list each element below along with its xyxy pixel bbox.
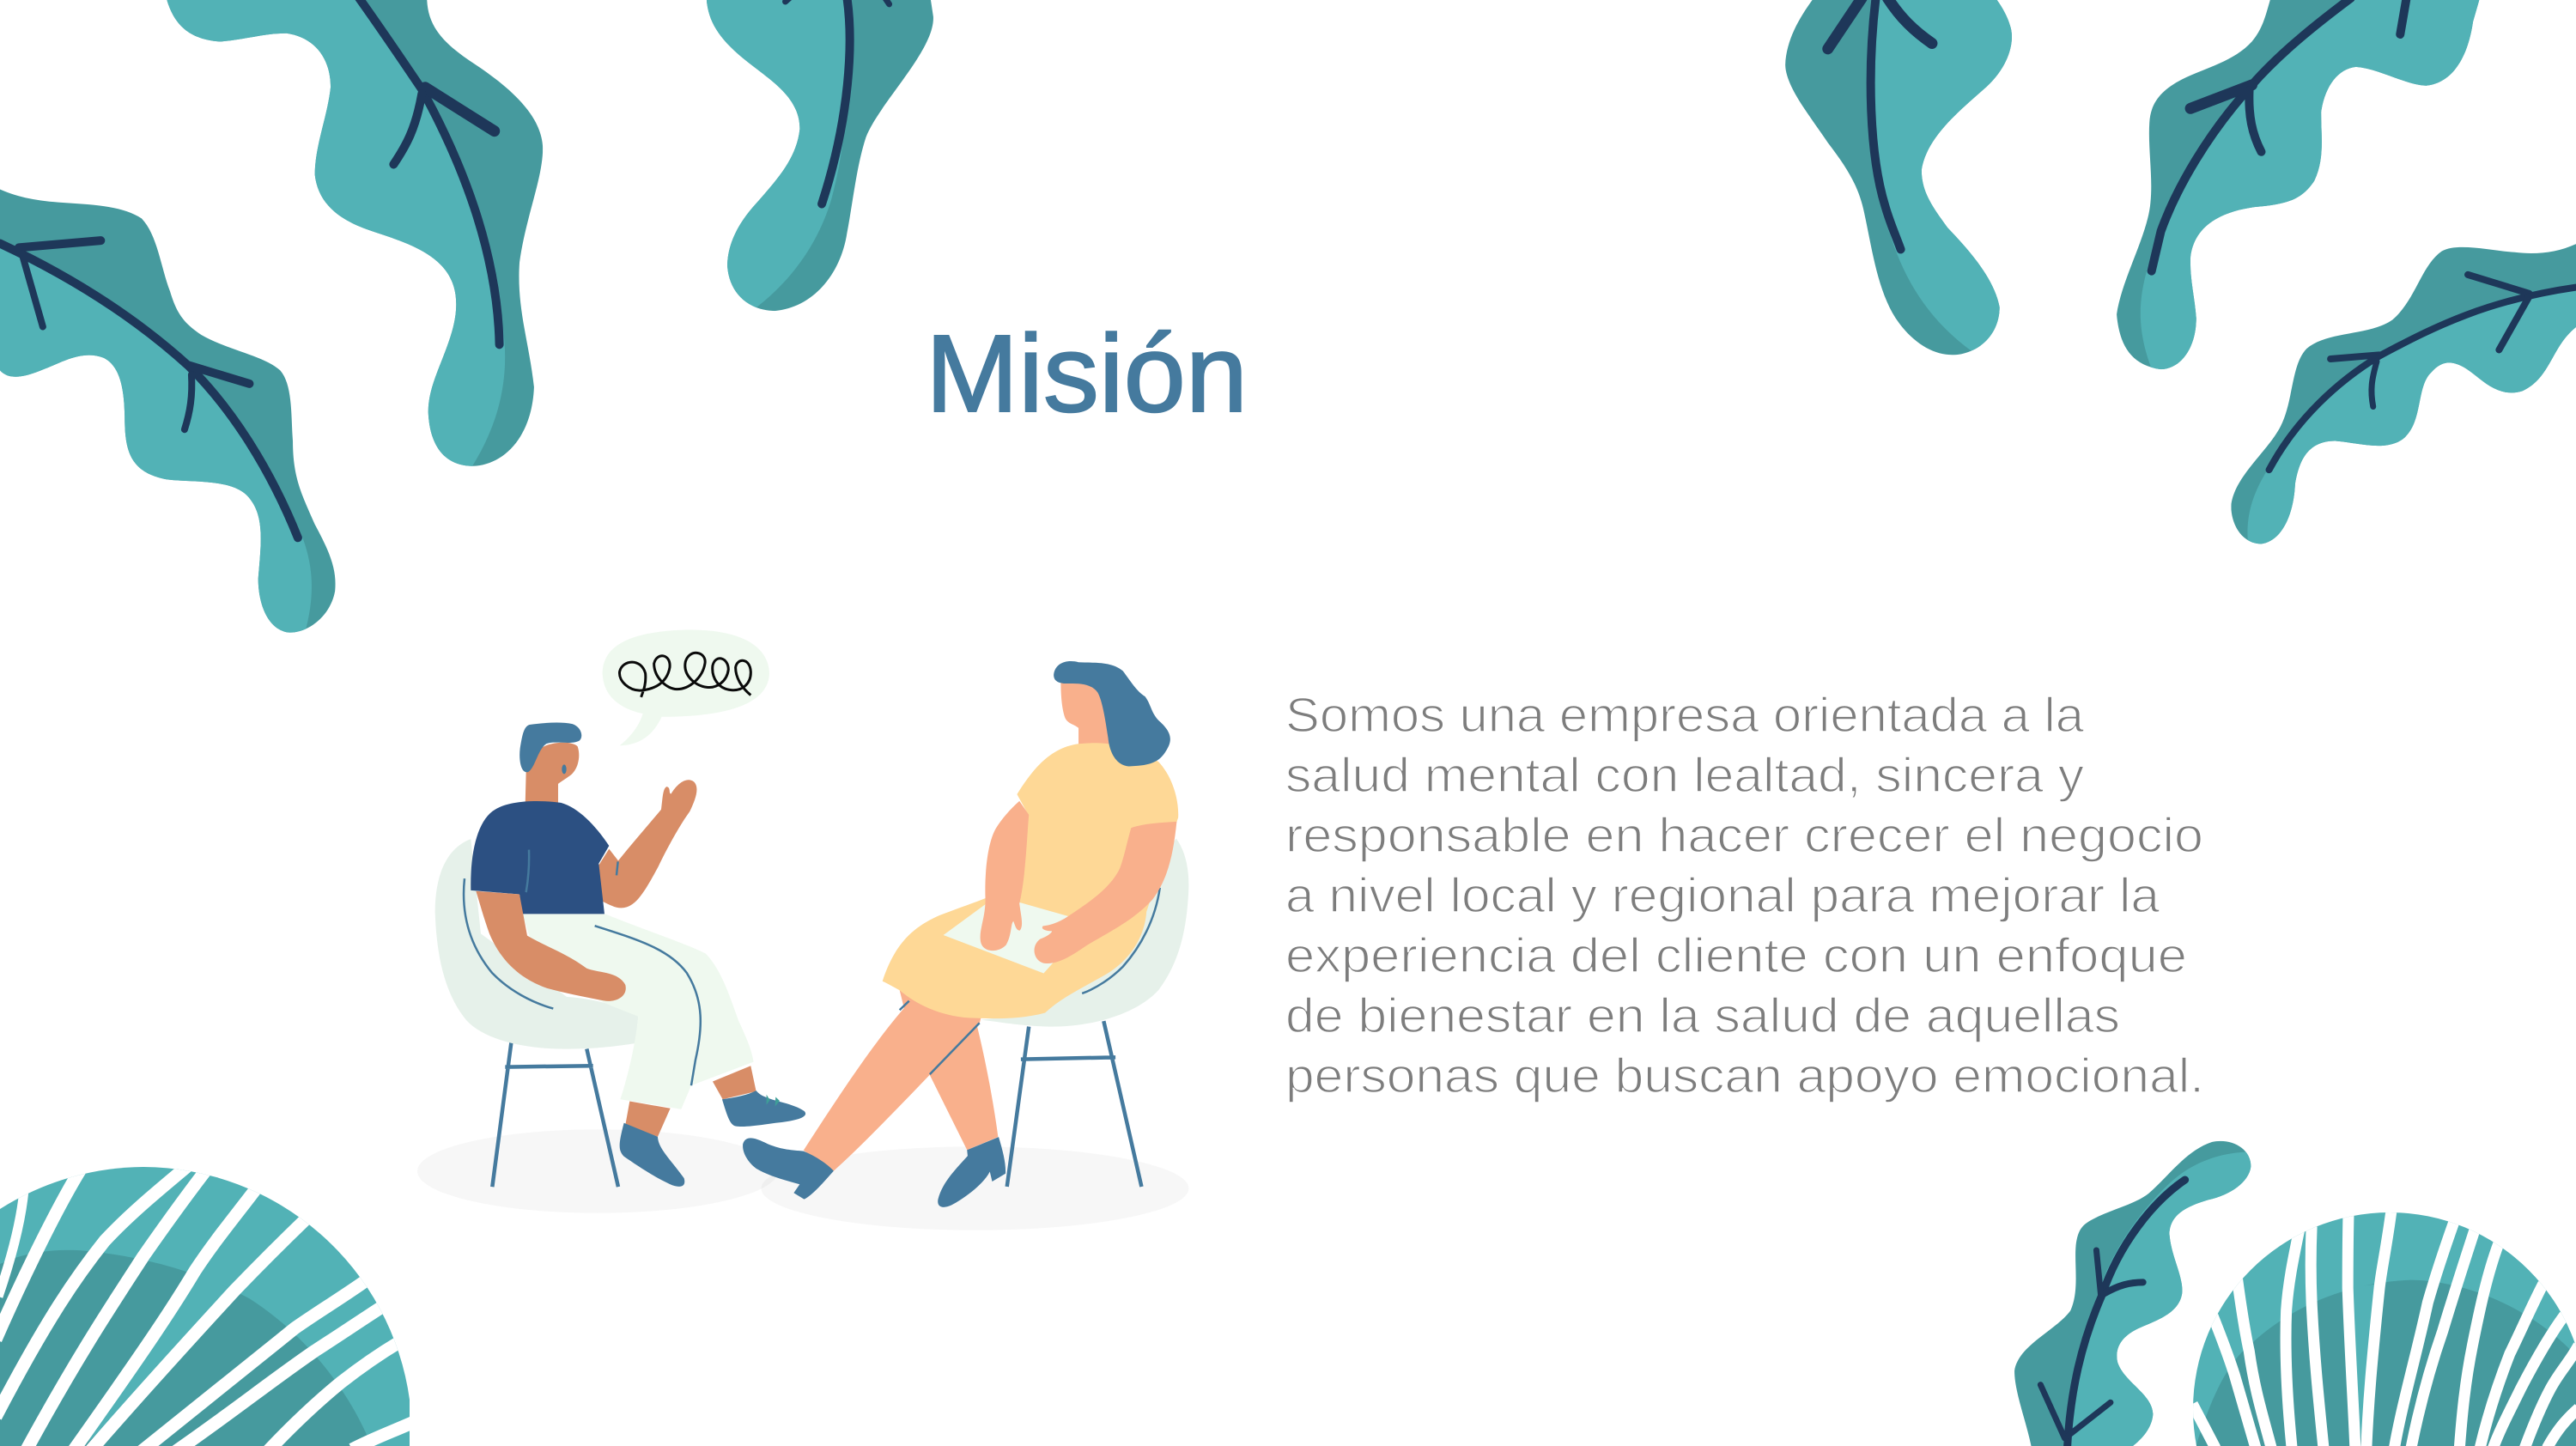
- mission text block: experiencia del cliente con un enfoque: [1285, 928, 2187, 983]
- leaf: top centre left: [706, 0, 933, 311]
- floor shadow: woman: [761, 1146, 1188, 1230]
- mission text block: de bienestar en la salud de aquellas: [1285, 988, 2120, 1043]
- laces: [767, 1095, 780, 1106]
- raised arm: [595, 780, 696, 908]
- torso: [1017, 743, 1178, 911]
- floor shadow: man: [417, 1129, 778, 1213]
- speech bubble: [603, 630, 769, 745]
- chair seat: [981, 838, 1188, 1027]
- chair seat: [435, 839, 638, 1049]
- leg lines: [900, 1001, 980, 1074]
- mission text block: salud mental con lealtad, sincera y: [1285, 748, 2085, 803]
- trouser crease: [595, 926, 701, 1085]
- left arm: [981, 801, 1029, 951]
- lowered arm: [476, 891, 626, 1001]
- neck and face: [1060, 681, 1111, 748]
- leaf: far left: [0, 189, 336, 633]
- mission text block: a nivel local y regional para mejorar la: [1285, 868, 2160, 923]
- leaf: right edge: [2231, 244, 2576, 544]
- fan plant: bottom left: [0, 1159, 414, 1446]
- back leg: [929, 1024, 998, 1150]
- right arm: [1035, 822, 1176, 963]
- mission text block: [1285, 688, 2204, 1103]
- figure: man in chair: [435, 630, 805, 1187]
- shins: [625, 1066, 756, 1137]
- chair legs: [1007, 1021, 1141, 1187]
- speech scribble: [619, 653, 750, 697]
- leaf: top right second: [2117, 0, 2480, 369]
- skirt: [883, 856, 1146, 1018]
- inner dark area of the fan: [2195, 1280, 2576, 1446]
- leaf: bottom right: [2014, 1140, 2251, 1446]
- shoes: [743, 1137, 1005, 1207]
- paper: [944, 902, 1068, 974]
- central light wedge: [2353, 1285, 2374, 1439]
- hair: [1054, 661, 1170, 766]
- mission text block: Somos una empresa orientada a la: [1285, 688, 2084, 743]
- chair back line: [464, 878, 553, 1009]
- shoes: [620, 1091, 805, 1187]
- title: Misión: [926, 313, 1248, 435]
- leaf: top right first: [1785, 0, 2012, 355]
- detail lines: [526, 850, 618, 892]
- chair legs: [492, 1041, 618, 1187]
- neck and head: [526, 743, 579, 805]
- front leg: [804, 990, 981, 1171]
- hair: [519, 723, 581, 772]
- mission text block: responsable en hacer crecer el negocio: [1285, 808, 2203, 863]
- figure: woman in chair: [743, 661, 1188, 1207]
- trousers: [522, 914, 754, 1109]
- chair back line: [1082, 888, 1160, 993]
- mission text block: personas que buscan apoyo emocional.: [1285, 1048, 2204, 1103]
- fan plant: bottom right: [2190, 1211, 2576, 1446]
- ear: [562, 764, 567, 774]
- leaf: upper left: [167, 0, 543, 466]
- shirt: [471, 801, 609, 914]
